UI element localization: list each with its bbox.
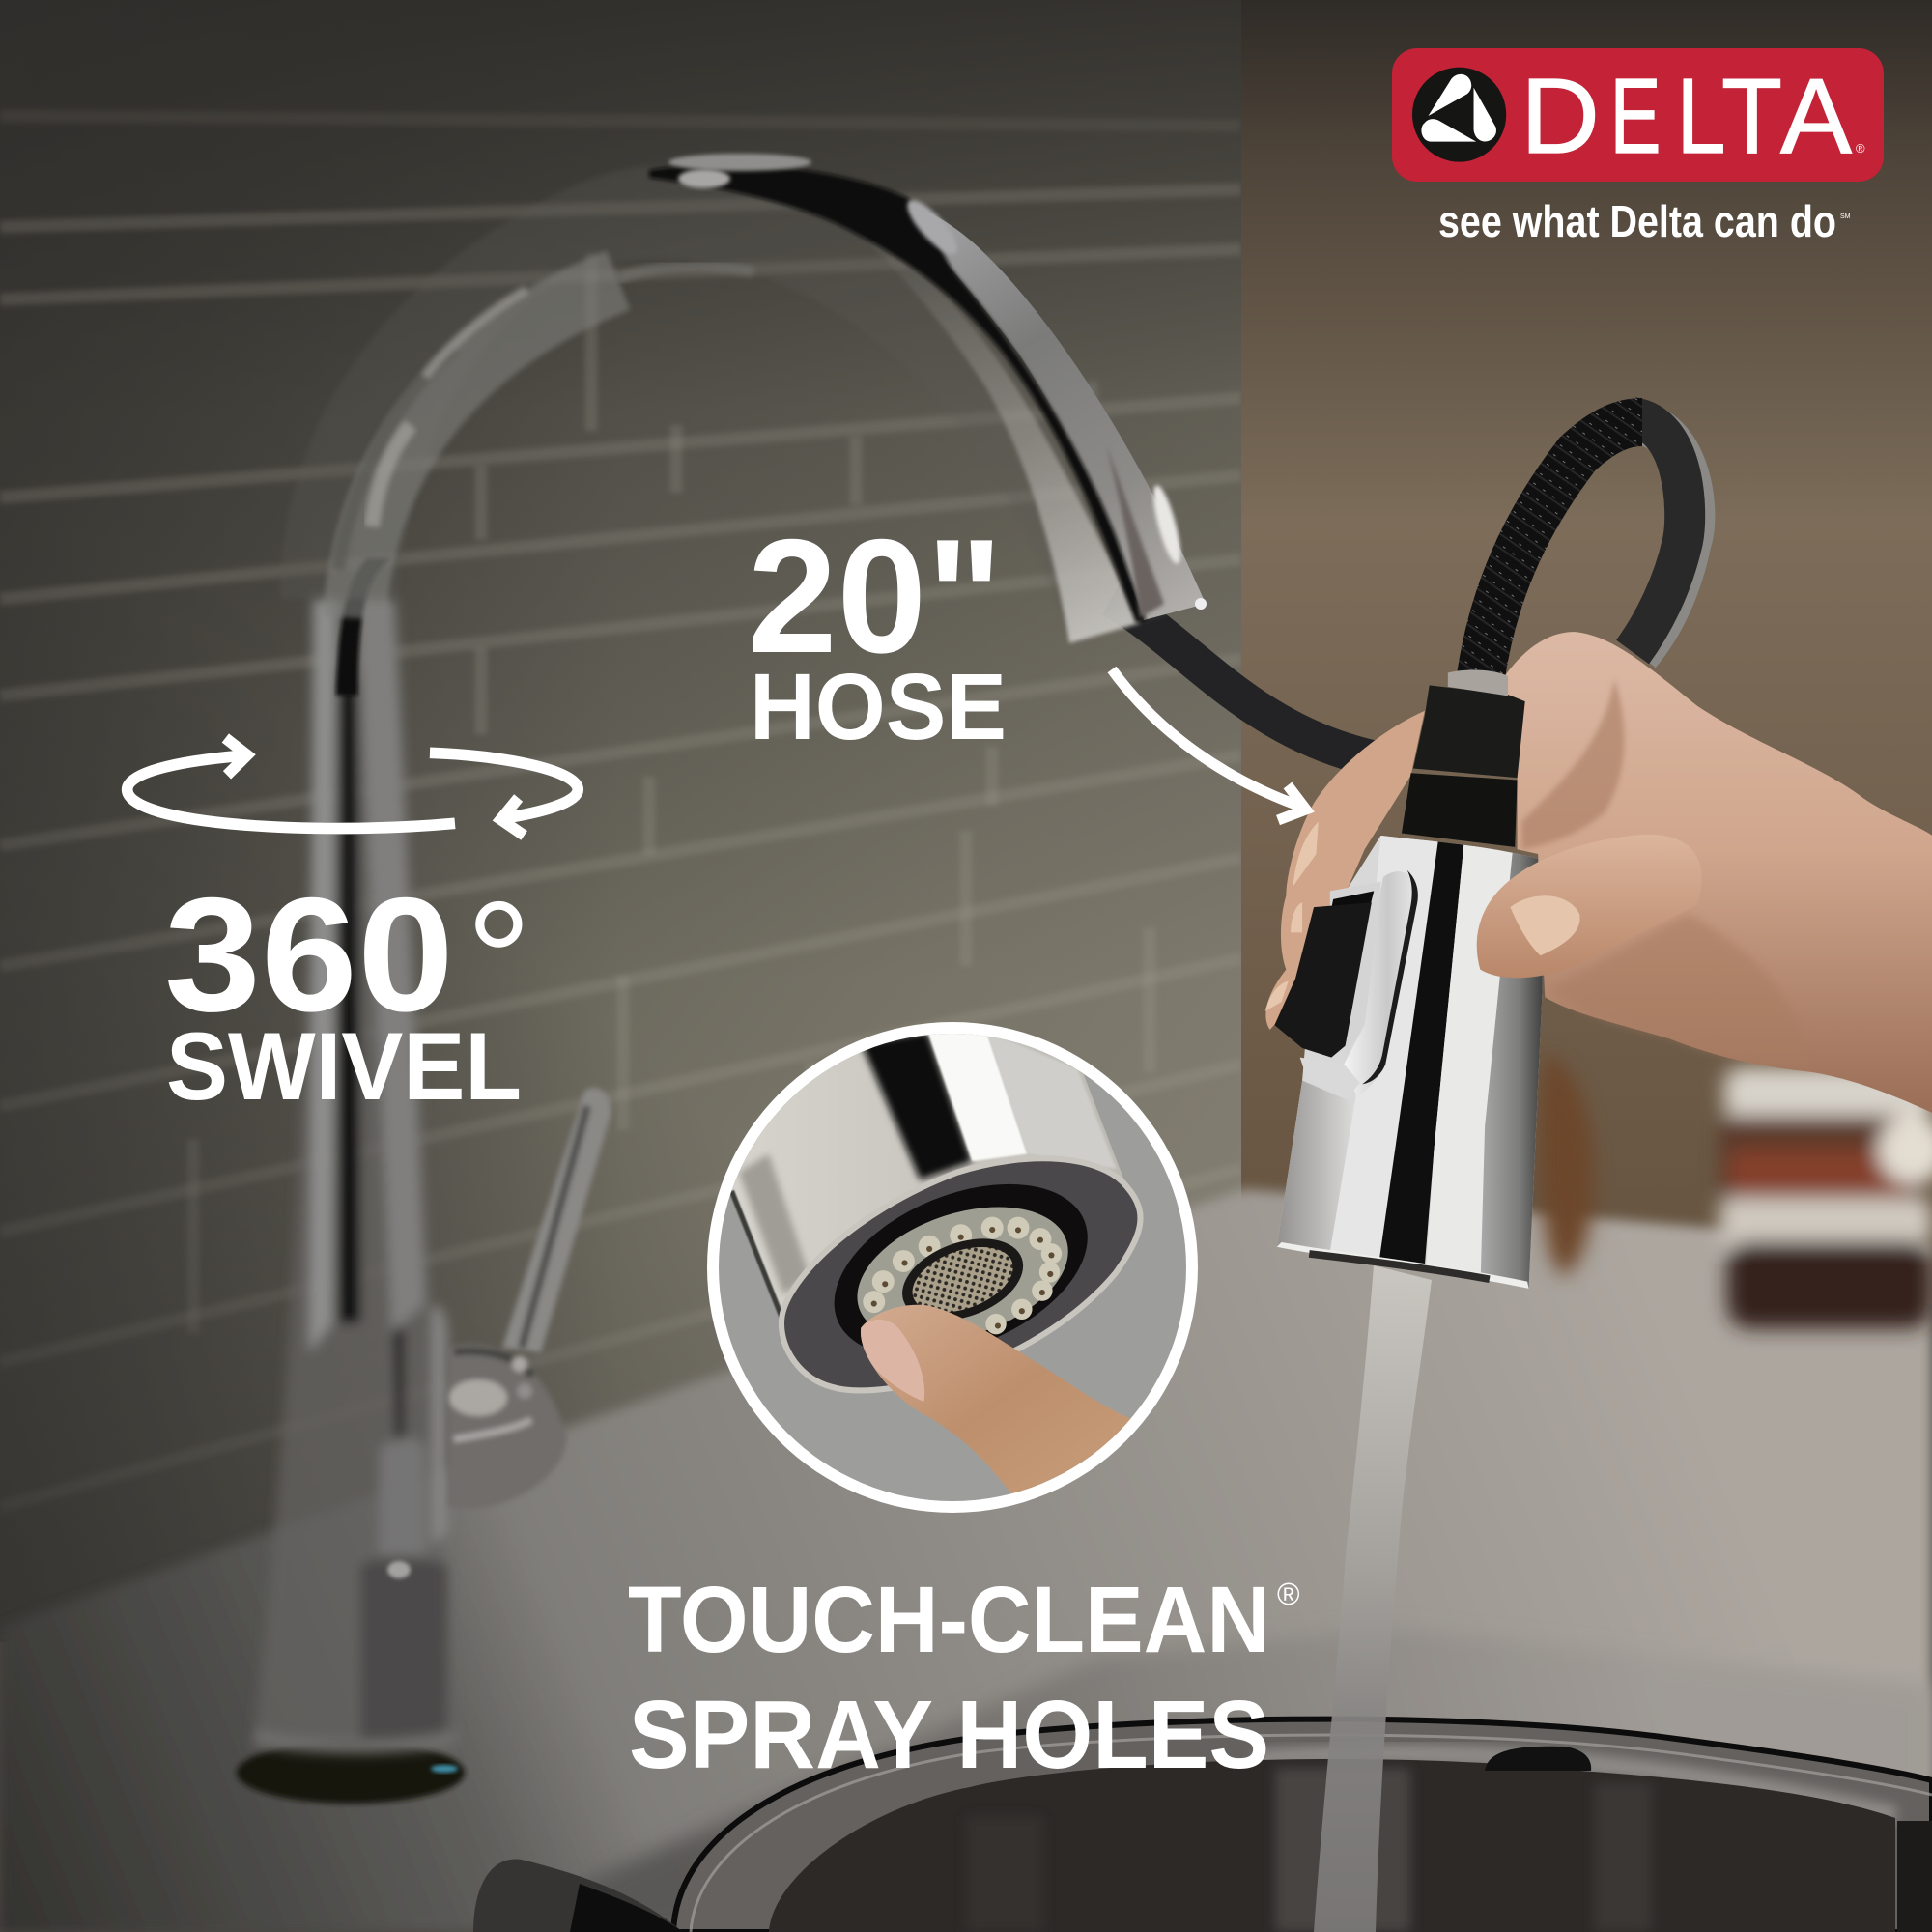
braided hose loop [1481,417,1693,676]
hand: palm crease shadow [1521,678,1625,849]
black hose collar [1402,670,1525,847]
arc ghost reflection [280,166,1203,643]
arc left chrome [355,280,618,618]
spray head face [781,1151,1140,1390]
callout: 360 degree swivel: SWIVEL [166,1012,522,1120]
hand: fingers [1265,711,1425,1030]
callout: 360 degree swivel: ° [466,867,532,1053]
faucet arc [280,154,1207,643]
black switch [1274,902,1372,1058]
neck dark core top [336,558,390,696]
Delta logo badge [1392,48,1884,182]
pull-down hose: black, behind hand [1111,599,1372,758]
switch recess [1331,891,1374,908]
plate dark edge [1362,870,1418,1084]
logo wordmark: L [1677,57,1725,176]
logo tagline: SM [1840,213,1851,220]
logo tagline: see what Delta can do [1438,196,1836,246]
callout: 20 inch hose: 20" [748,505,1003,687]
thumbnail [1510,895,1580,955]
fingernails [1265,822,1319,1011]
jars on counter [1540,1053,1932,1328]
chrome sprayer body [1277,836,1543,1289]
callout: touch-clean spray holes: ® [1277,1577,1300,1611]
logo wordmark: A [1780,57,1853,176]
switch upper frame [1330,882,1380,1055]
icon: swivel rotation arrows [128,738,578,836]
spout dark edge [649,164,1146,623]
hand: back of hand [1503,632,1932,1115]
logo wordmark: E [1609,57,1662,176]
callout: touch-clean spray holes [628,1567,1300,1789]
sprayer and hand [1254,632,1932,1297]
sink bowl [473,1719,1932,1932]
faucet base [237,1742,465,1804]
chrome switch plate [1344,871,1417,1099]
faucet handle [447,1088,611,1509]
thumb [1477,835,1702,978]
water stream [1314,1265,1432,1932]
spout inner chrome band [850,224,1140,643]
sink basin cutout [580,1628,1932,1932]
sprayer bottom rim [1277,1242,1529,1289]
callout: 20 inch hose: HOSE [750,654,1007,759]
logo wordmark: D [1520,57,1600,176]
logo emblem [1412,68,1506,162]
hand: lower palm shadow [1549,914,1808,1066]
logo wordmark: T [1721,57,1782,176]
fingertip [861,1305,1135,1497]
callout: touch-clean spray holes: TOUCH-CLEAN [628,1567,1270,1672]
callout: touch-clean spray holes: SPRAY HOLES [629,1681,1269,1789]
faucet neck [253,599,456,1754]
switch front trim [1300,1058,1360,1099]
arrow: hose to sprayer [1112,669,1306,820]
registered mark: ® [1856,141,1865,156]
background: tiled wall [0,0,1246,1642]
inset circle: touch-clean spray head [707,1022,1198,1513]
spout outer chrome band [889,198,1206,620]
callout: 360 degree swivel [164,864,532,1120]
background: brown wall [1241,0,1932,1304]
faucet: blurred neck, base and handle [237,558,611,1804]
callout: 360 degree swivel: 360 [164,864,454,1045]
spout highlights [900,193,964,261]
fingernail [861,1320,924,1402]
spray head barrel [730,1034,1124,1318]
background: counter [0,1189,1932,1932]
